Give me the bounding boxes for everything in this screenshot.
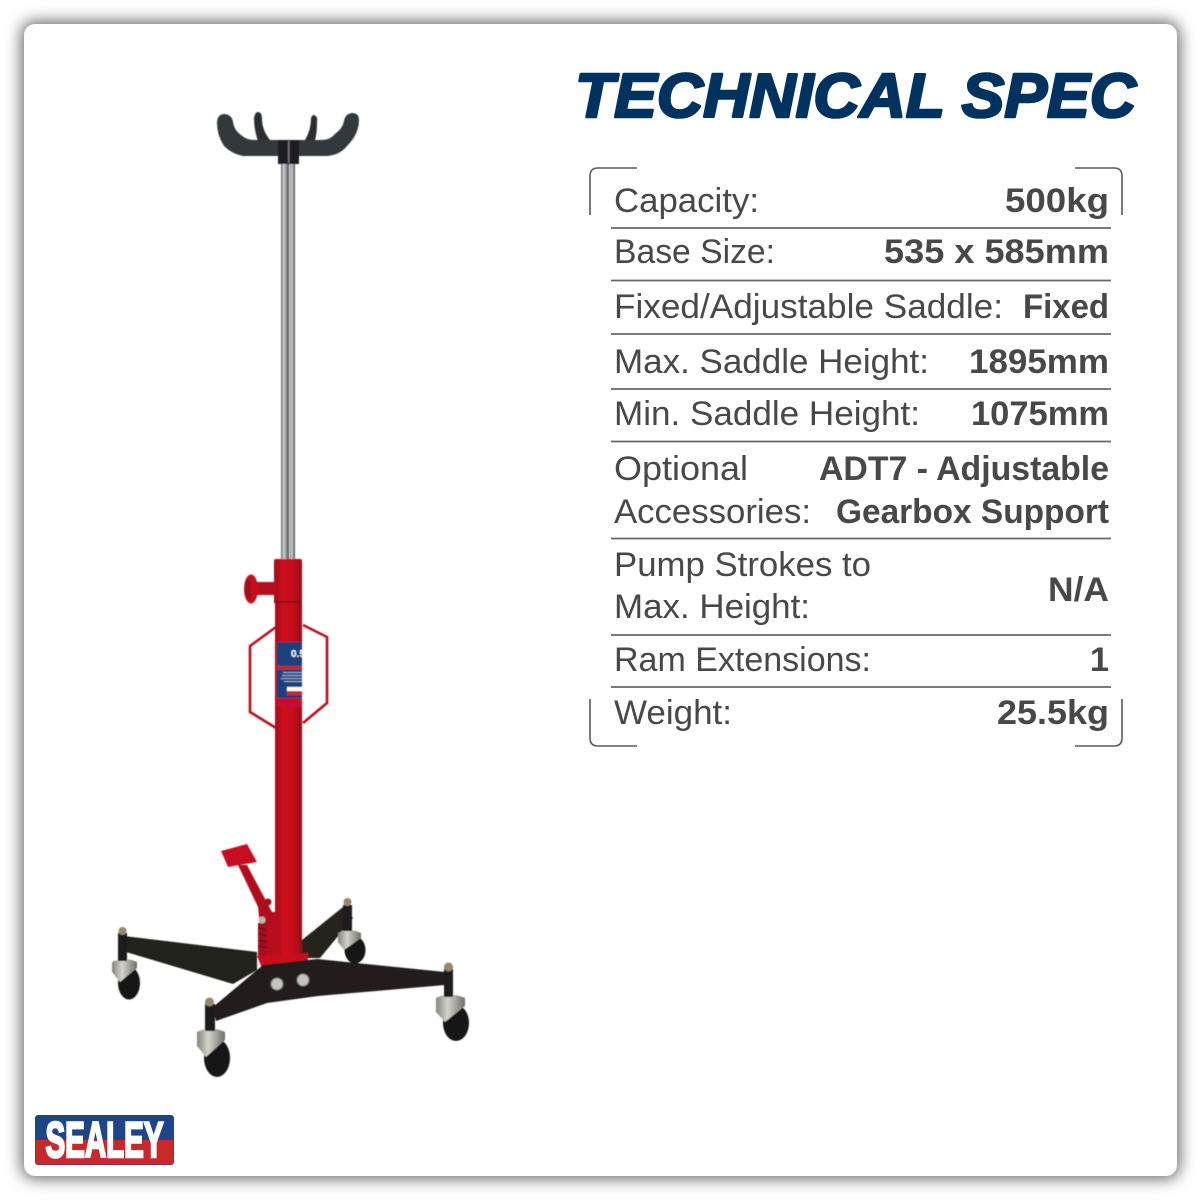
row: base size: Base Size:	[614, 233, 775, 271]
bracket: top left corner	[590, 168, 637, 215]
row: fixed or adjustable saddle: Fixed/Adjustable Saddle:	[614, 288, 1003, 326]
row: weight: 25.5kg	[997, 694, 1109, 732]
jack rods	[281, 160, 295, 562]
row: weight: Weight:	[614, 694, 732, 732]
pump block and spring	[257, 912, 308, 968]
row: capacity: Capacity:	[614, 182, 759, 220]
row: pump strokes: N/A	[1048, 571, 1109, 609]
bracket: top right corner	[1075, 168, 1122, 215]
row: ram extensions: Ram Extensions:	[614, 641, 871, 679]
bracket: bottom right corner	[1075, 699, 1122, 746]
product label: 0.5	[291, 649, 305, 660]
logo: Sealey: SEALEY	[46, 1112, 164, 1168]
foot pedal	[221, 844, 257, 867]
row: max saddle height: 1895mm	[969, 343, 1109, 381]
pump pivot	[258, 898, 272, 924]
row: min saddle height: 1075mm	[971, 395, 1109, 433]
row: pump strokes: Pump Strokes to	[614, 546, 871, 584]
row: base size: 535 x 585mm	[884, 233, 1109, 271]
front base plate	[213, 959, 445, 1021]
row: min saddle height	[614, 395, 1109, 433]
row: max saddle height	[614, 343, 1109, 381]
pedal lever	[238, 865, 272, 925]
row: ram extensions	[614, 641, 1109, 679]
row: optional accessories: Accessories:	[614, 493, 811, 531]
bolts	[271, 974, 309, 990]
row: base size	[614, 233, 1109, 271]
caster: rear right	[338, 898, 366, 964]
caster: rear left	[112, 927, 140, 1000]
row: capacity: 500kg	[1005, 182, 1109, 220]
row: capacity	[614, 182, 1109, 220]
rear left base arm	[124, 936, 257, 984]
row: optional accessories: Gearbox Support	[836, 493, 1109, 531]
row: pump strokes: Max. Height:	[614, 588, 810, 626]
row: max saddle height: Max. Saddle Height:	[614, 343, 929, 381]
red column	[274, 559, 302, 960]
rear right base arm	[302, 907, 353, 958]
release knob	[244, 574, 276, 604]
row: optional accessories	[614, 450, 1109, 531]
saddle	[217, 112, 359, 164]
row: fixed or adjustable saddle: Fixed	[1023, 288, 1109, 326]
logo: Sealey	[35, 1112, 174, 1168]
product label	[277, 642, 305, 707]
row: optional accessories: ADT7 - Adjustable	[819, 450, 1109, 488]
illustration: transmission jack	[112, 112, 469, 1077]
row: weight	[614, 694, 1109, 732]
panel: specification table	[590, 168, 1122, 746]
caster: front right	[436, 962, 469, 1041]
hexagonal handle	[250, 625, 327, 728]
row: optional accessories: Optional	[614, 450, 748, 488]
bracket: bottom left corner	[590, 699, 637, 746]
row: min saddle height: Min. Saddle Height:	[614, 395, 920, 433]
caster: front left	[197, 998, 230, 1077]
row: pump strokes	[614, 546, 1109, 626]
title: TECHNICAL SPEC	[575, 62, 1137, 131]
row: ram extensions: 1	[1090, 641, 1109, 679]
